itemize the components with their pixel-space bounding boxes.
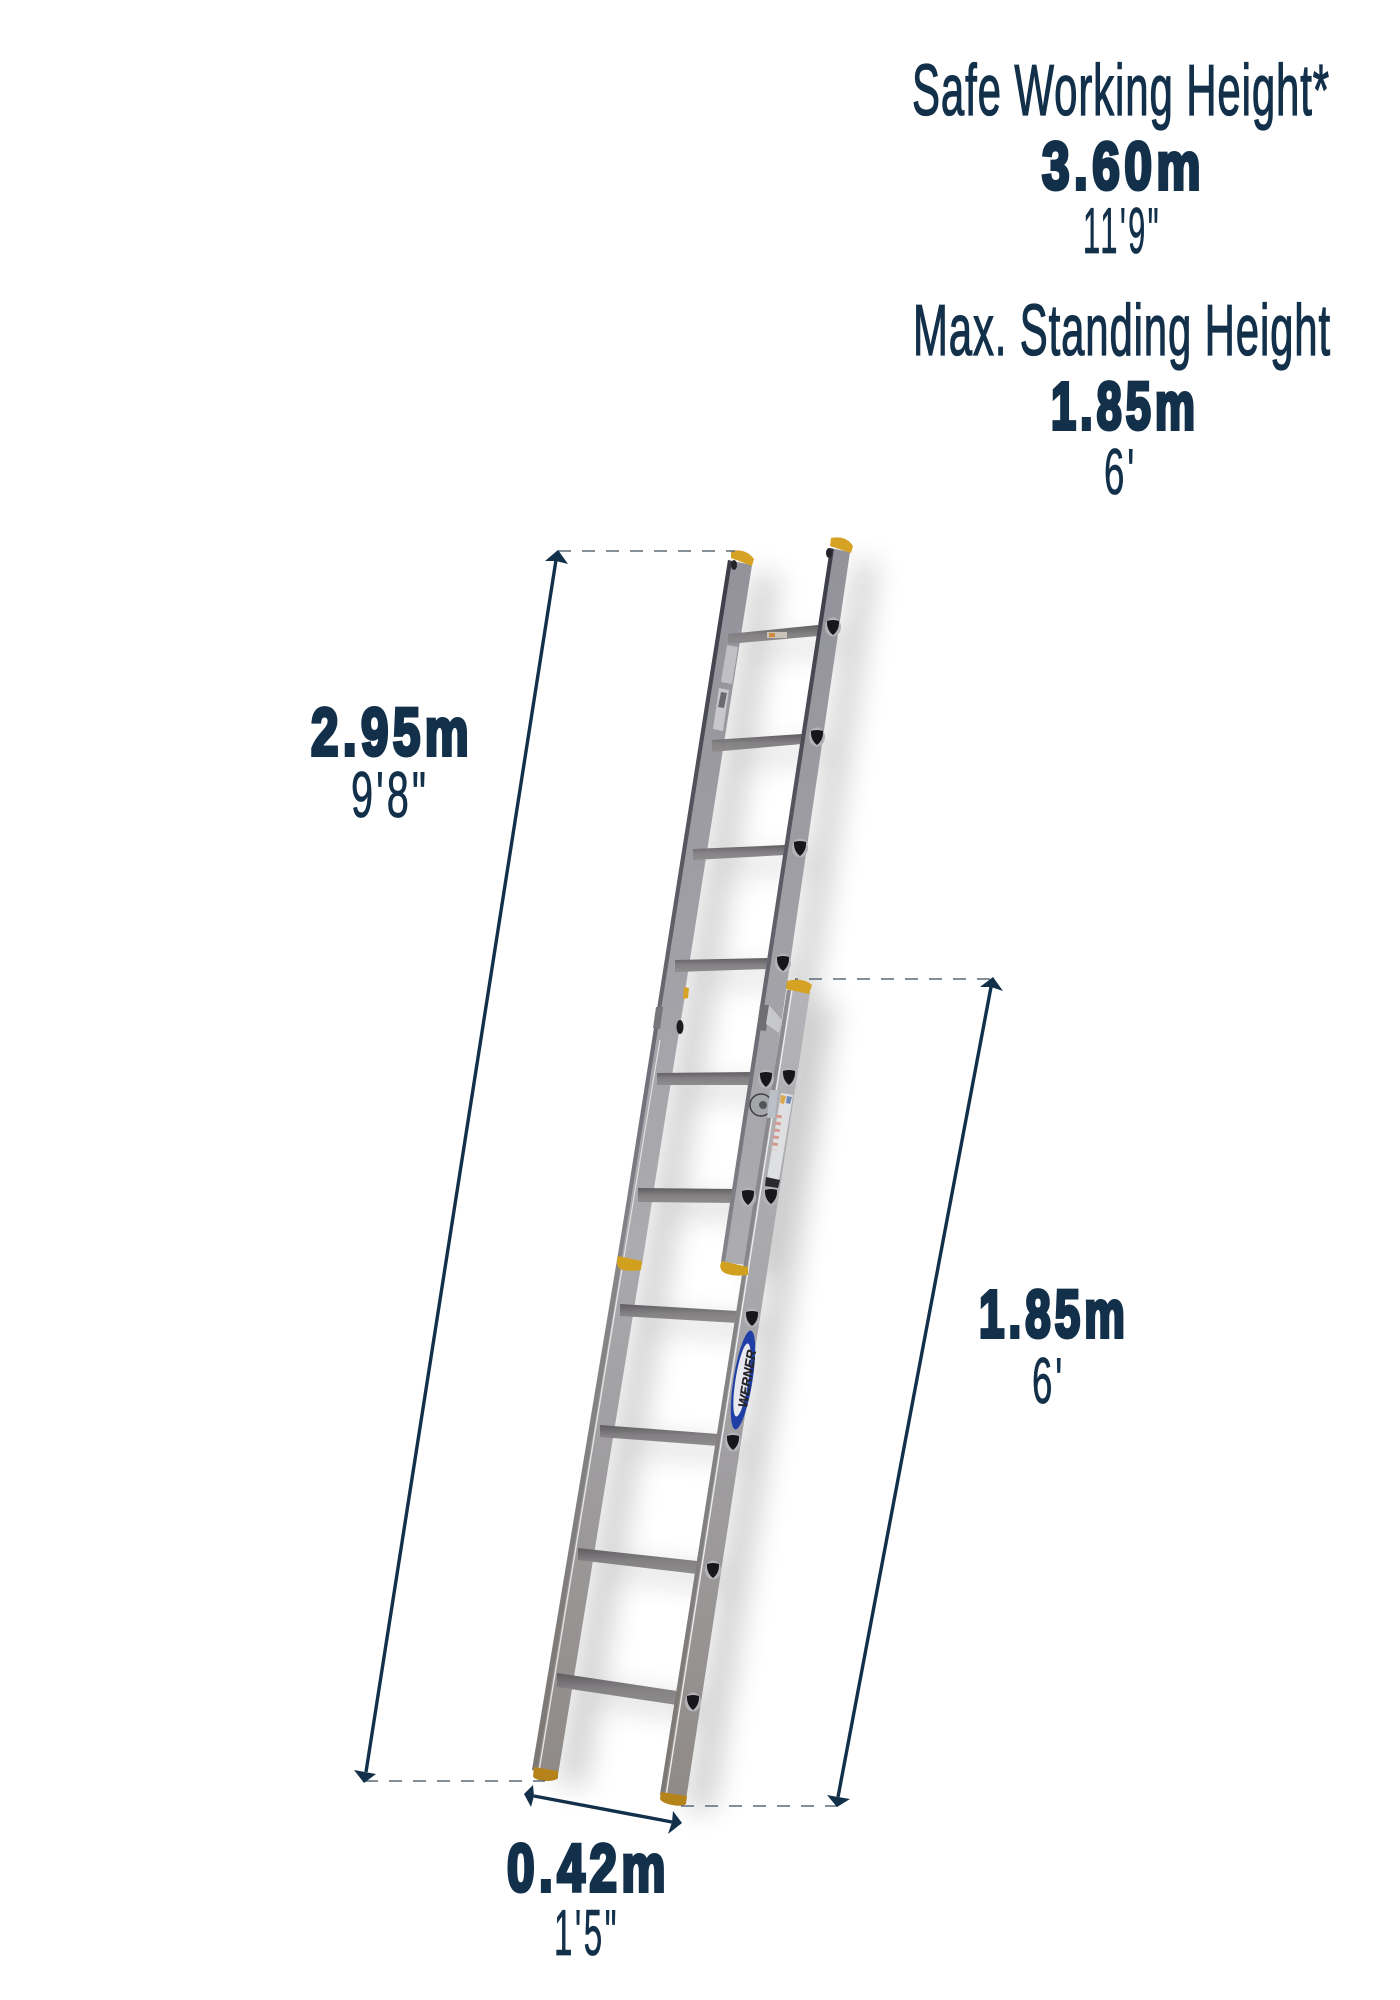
upper section right rail xyxy=(721,548,850,1265)
Werner logo: WERNER xyxy=(735,1348,759,1408)
text: closed length label xyxy=(979,1277,1129,1417)
upper section left rail xyxy=(617,560,752,1265)
text: overall length label: 2.95m xyxy=(311,695,473,770)
safety labels xyxy=(713,632,793,1188)
arrow: 1.85m closed length xyxy=(827,977,1003,1807)
text: max standing height: 1.85m xyxy=(1051,369,1199,444)
text: max standing height: 6' xyxy=(1104,435,1137,508)
Werner logo xyxy=(726,1329,760,1431)
lower section right rail xyxy=(660,990,810,1800)
rung fixing holes xyxy=(685,618,841,1712)
arrow: 0.42m width xyxy=(524,1785,682,1834)
text: width label: 1'5" xyxy=(554,1896,619,1969)
lower section left rail xyxy=(532,990,686,1775)
arrow: 2.95m overall length xyxy=(354,550,568,1783)
text: max standing height xyxy=(913,291,1331,508)
text: closed length label: 6' xyxy=(1032,1344,1065,1417)
text: overall length label: 9'8" xyxy=(351,758,429,831)
text: closed length label: 1.85m xyxy=(979,1277,1129,1352)
text: width label: 0.42m xyxy=(507,1831,670,1906)
rail guide brackets xyxy=(653,548,832,1034)
extension ladder xyxy=(532,537,853,1806)
dashed reference lines xyxy=(365,551,990,1806)
text: safe working height: 3.60m xyxy=(1042,129,1205,204)
rope pawl mechanism xyxy=(750,1090,778,1118)
text: safe working height xyxy=(912,51,1330,267)
ladder drop shadow xyxy=(558,560,876,1812)
text: safe working height: 11'9" xyxy=(1083,194,1161,267)
text: overall length label xyxy=(311,695,473,831)
text: width label xyxy=(507,1831,670,1969)
yellow end caps xyxy=(533,537,853,1806)
rungs xyxy=(557,625,818,1705)
